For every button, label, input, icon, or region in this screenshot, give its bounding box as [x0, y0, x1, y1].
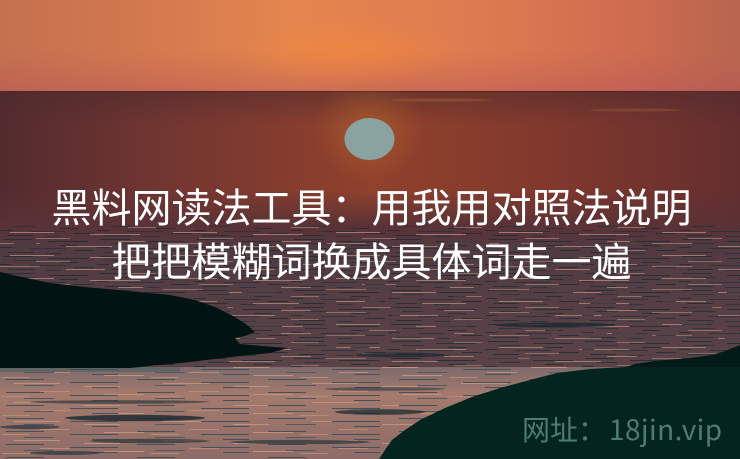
panel: lower bright sea [0, 367, 740, 459]
panel: upper sea [0, 91, 740, 226]
title [52, 176, 692, 288]
title: 黑料网读法工具：用我用对照法说明 [52, 176, 692, 234]
panel: sunset sky [0, 0, 740, 91]
icon: sun [313, 78, 425, 182]
panel: middle rippled sea [0, 226, 740, 367]
watermark: 网址：18jin.vip [522, 409, 723, 449]
icon: right shore silhouette [379, 345, 740, 459]
icon: left island silhouette [0, 272, 288, 368]
title: 把把模糊词换成具体词走一遍 [112, 230, 632, 288]
